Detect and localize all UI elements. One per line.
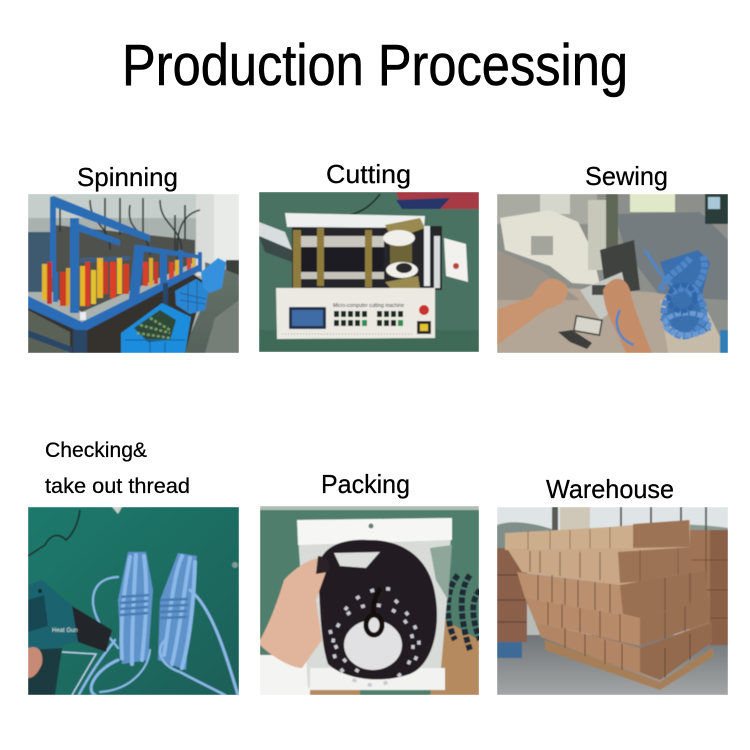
left carton bank [497,548,527,642]
leash rope mass [318,540,437,679]
control panel [276,288,435,339]
photo: warehouse carton stacks [497,507,728,695]
white lower left [260,655,310,695]
blue machine frame [50,196,202,313]
bobbins red yellow [42,258,195,306]
pallet [545,640,714,690]
heat gun [28,580,78,649]
photo: sewing station [497,194,728,353]
right carton stack [690,530,711,646]
bottom layer [535,622,712,680]
photo: packed rope in plastic bag [260,506,480,695]
heading: Warehouse: Warehouse [546,474,674,504]
rope coils [118,552,153,664]
sewing machine [497,194,597,224]
machine body [292,226,442,290]
blue crates [121,303,191,353]
photo: cutting machine: Micro-computer cutting machine [333,303,404,309]
photo: checking rope with heat gun: Heat Gun [52,628,78,634]
heading: Spinning: Spinning [77,162,178,192]
heading: Packing: Packing [321,469,410,499]
red and blue bag [396,192,479,209]
arms [497,279,568,345]
label sheet [444,238,468,282]
top layer [505,520,690,550]
fourth layer [525,598,641,646]
table edge [28,264,200,333]
photo: cutting machine [259,192,479,352]
hand [260,558,328,668]
dark machine interior [55,225,195,312]
cardboard and spare rope [430,620,479,695]
title: Production Processing [122,33,628,98]
second layer [508,547,692,585]
heading: Checking & take out thread: take out thread [45,475,190,498]
third layer [516,572,636,618]
heading: Cutting: Cutting [326,159,411,189]
heading: Sewing: Sewing [585,161,668,191]
snap hook [373,588,380,618]
photo: spinning machines [28,194,239,353]
blue rope coil [660,250,711,338]
photo: checking rope with heat gun [28,507,239,700]
heading: Checking & take out thread [45,439,190,498]
roller [384,218,425,234]
plastic bag [297,518,452,688]
heading: Checking & take out thread: Checking& [45,439,147,462]
